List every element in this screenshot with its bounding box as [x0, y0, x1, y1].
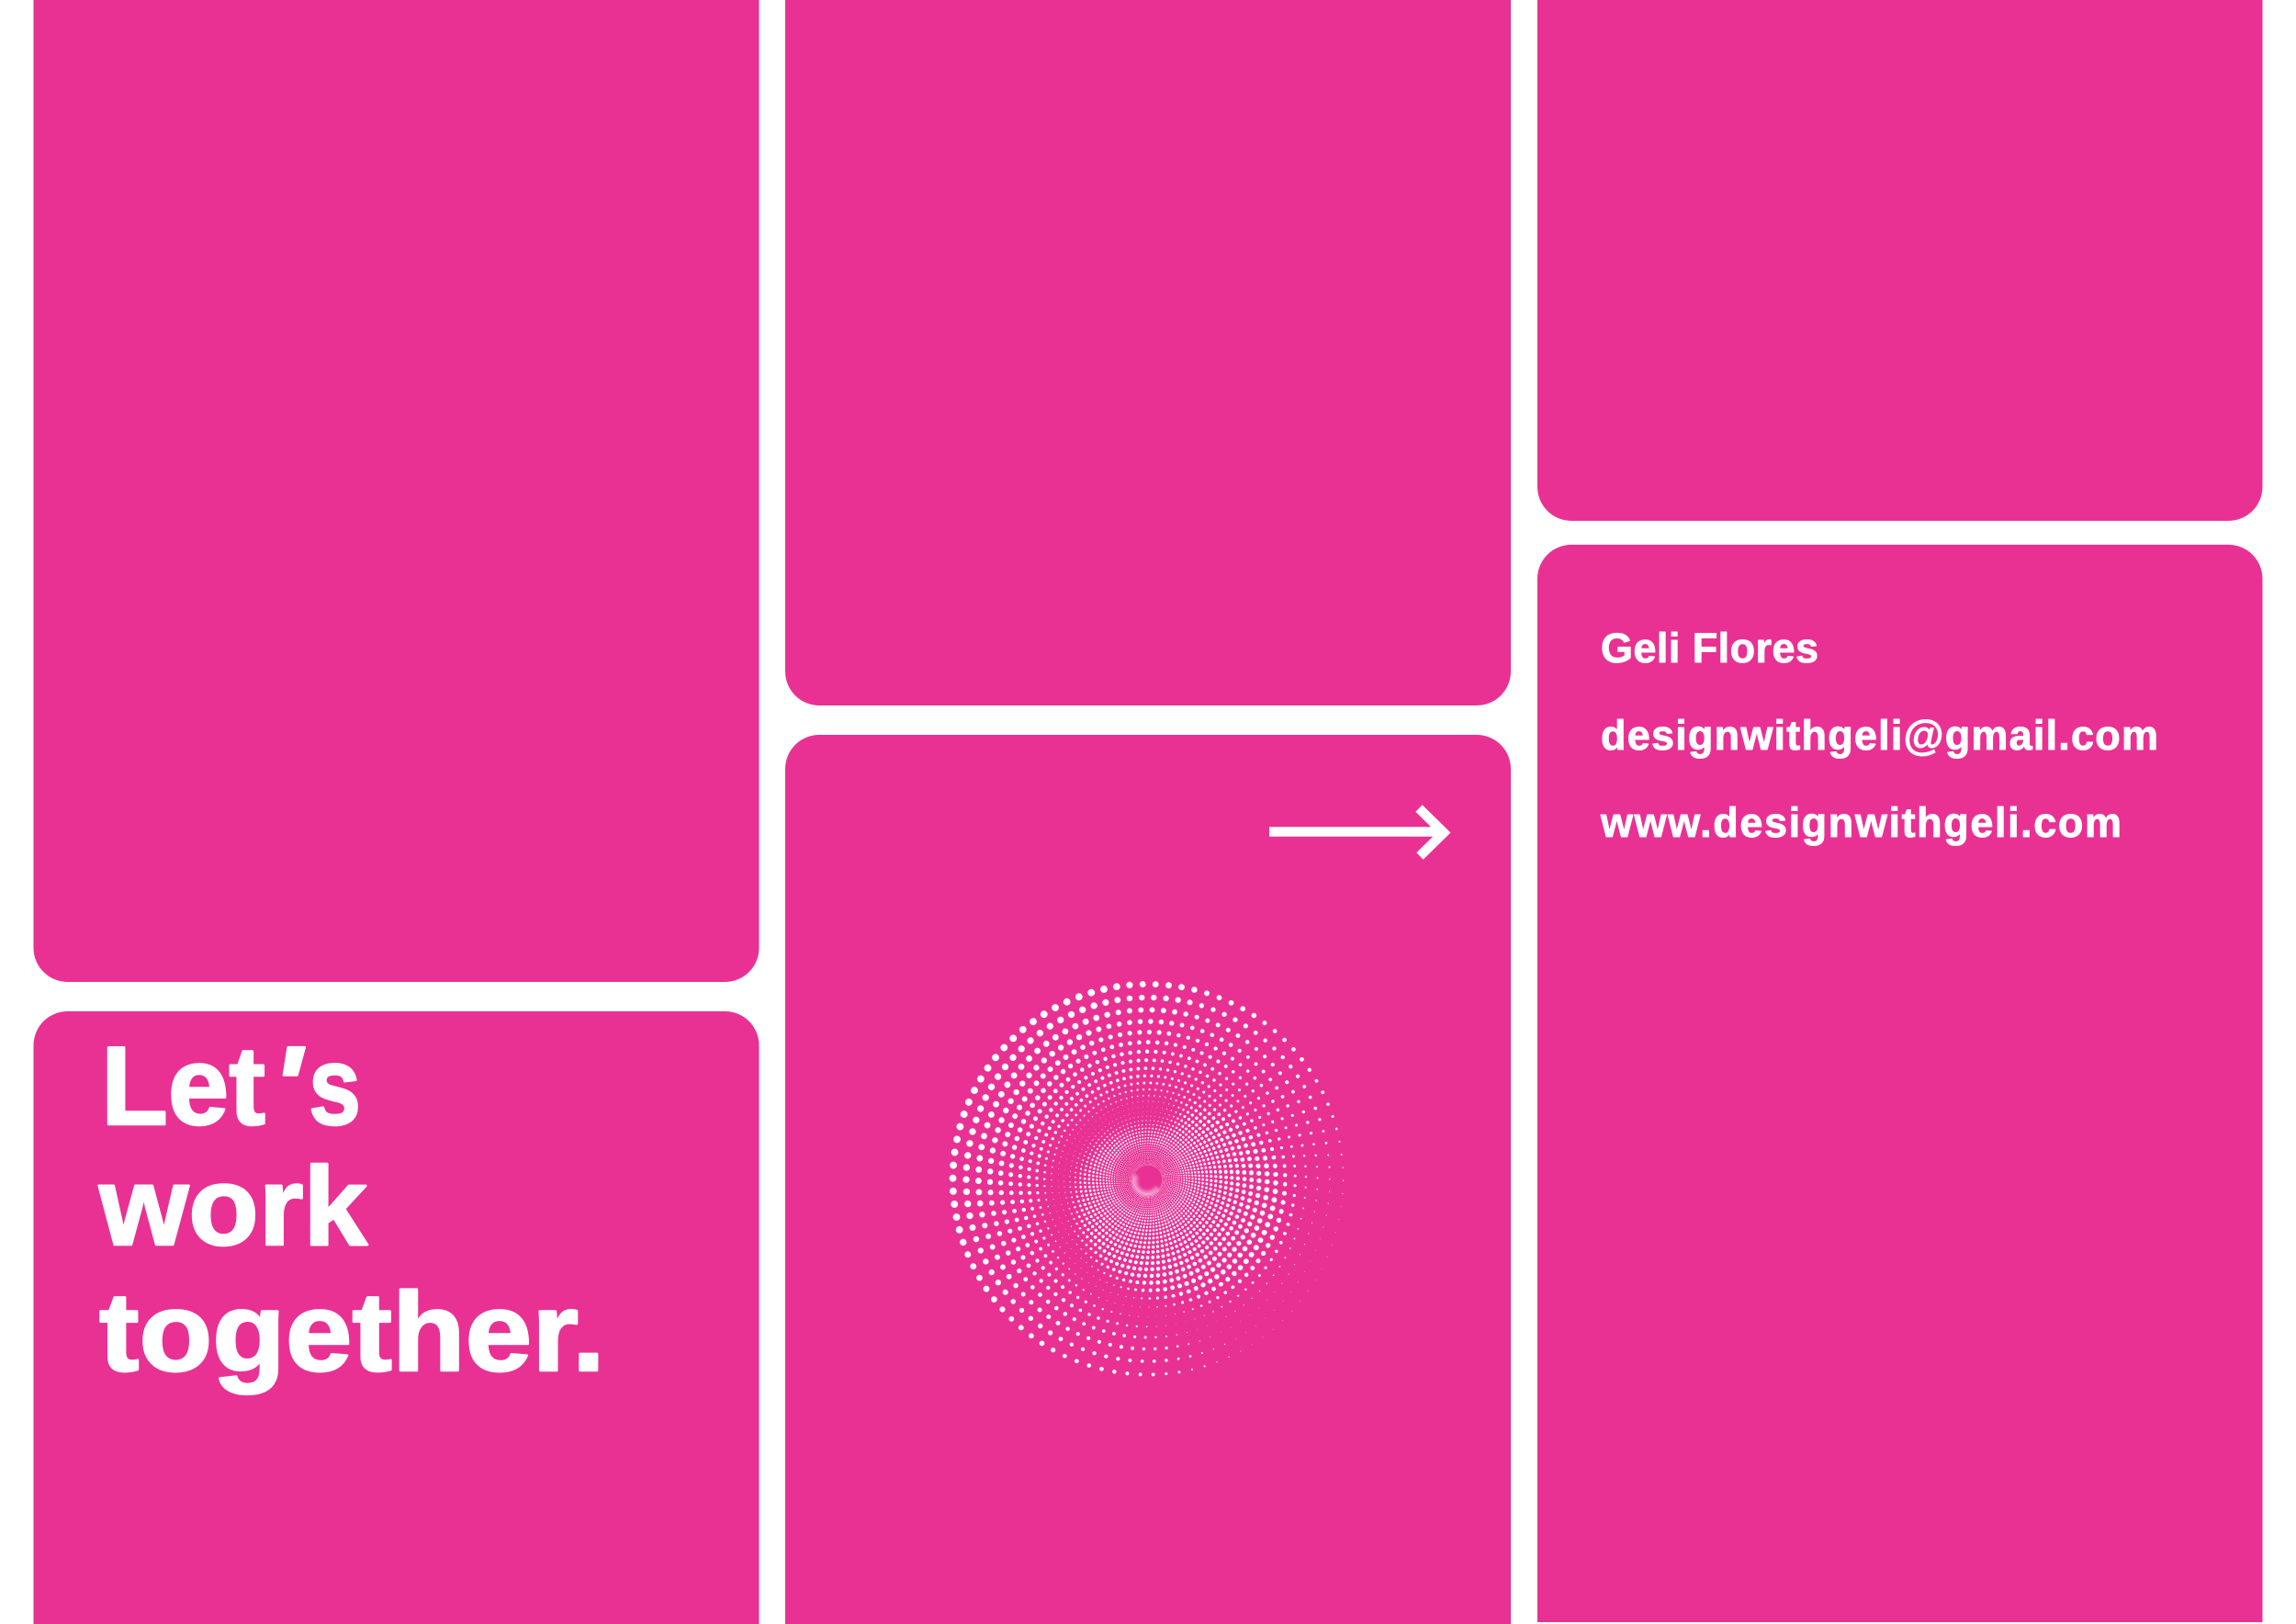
contact name: Geli Flores [1601, 625, 1818, 671]
contact email: designwithgeli@gmail.com [1601, 712, 2158, 759]
heading: Let's work together. [98, 1023, 605, 1394]
panel: top right [1537, 0, 2263, 521]
heading line 1: Let [101, 1023, 265, 1148]
panel: headline [33, 1011, 759, 1624]
halftone dot spiral [951, 983, 1345, 1376]
panel: spiral and arrow [785, 735, 1511, 1624]
contact website: www.designwithgeli.com [1600, 799, 2122, 846]
panel: top middle [785, 0, 1511, 705]
heading line 1: s [309, 1023, 361, 1148]
contact text [1600, 625, 2158, 846]
panel: top left [33, 0, 759, 982]
heading line 2: work [98, 1144, 367, 1269]
heading line 1: ' [272, 1023, 305, 1148]
icon: arrow [1269, 808, 1444, 856]
panel: contact details [1537, 545, 2263, 1622]
heading line 3: together. [99, 1269, 605, 1394]
